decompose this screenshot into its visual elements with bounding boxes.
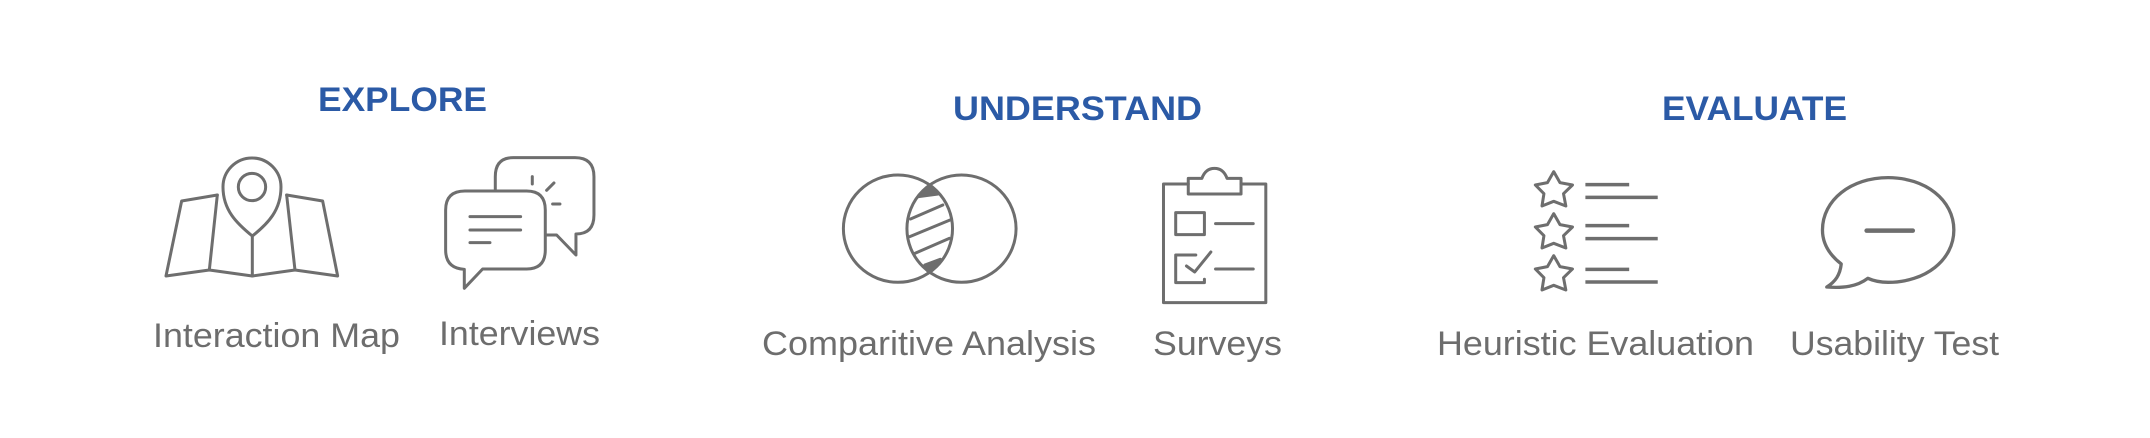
label: Comparitive Analysis: Comparitive Analysis [762, 325, 1096, 363]
icon: chat bubbles [446, 158, 594, 288]
icon: clipboard checklist [1163, 168, 1266, 303]
label: Surveys: Surveys [1153, 325, 1282, 363]
panel: understand [762, 90, 1282, 363]
icon: speech bubble [1822, 178, 1954, 287]
panel: evaluate [1437, 90, 2000, 363]
heading: EVALUATE: EVALUATE [1662, 90, 1847, 128]
heading: EXPLORE: EXPLORE [318, 81, 487, 119]
label: Interviews: Interviews [439, 315, 600, 353]
icon: star ratings [1535, 172, 1658, 290]
icon: venn diagram [843, 175, 1016, 282]
panel: explore [153, 81, 600, 355]
icon: map with pin [166, 158, 338, 276]
heading: UNDERSTAND: UNDERSTAND [953, 90, 1202, 128]
label: Interaction Map: Interaction Map [153, 317, 400, 355]
label: Heuristic Evaluation: Heuristic Evaluation [1437, 325, 1754, 363]
label: Usability Test: Usability Test [1790, 325, 2000, 363]
